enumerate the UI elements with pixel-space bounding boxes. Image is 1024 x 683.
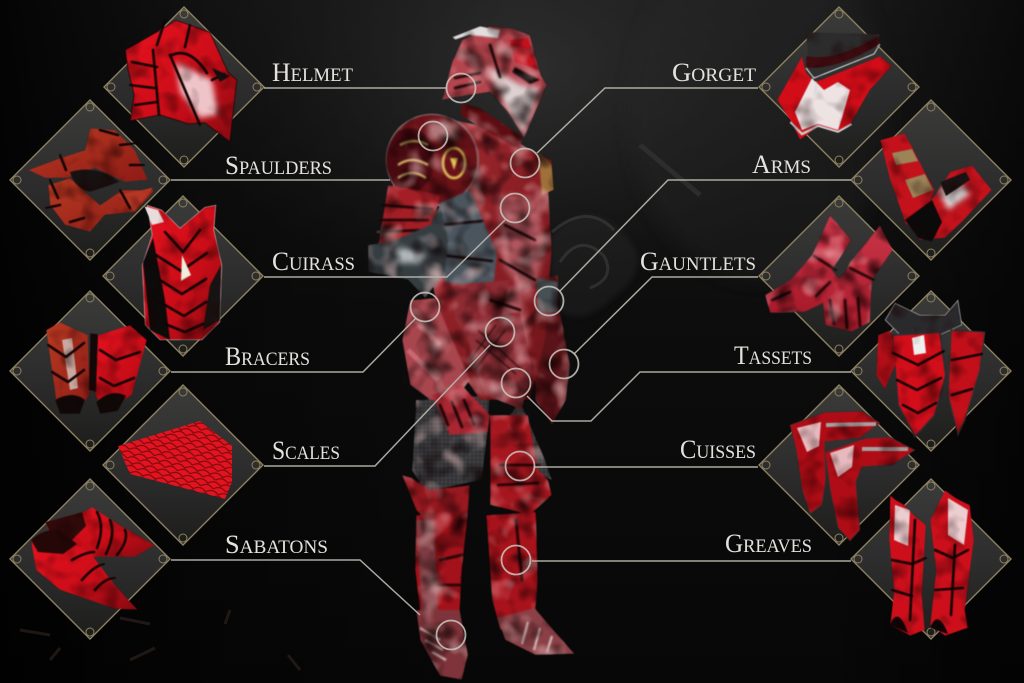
panel: arms	[851, 100, 1011, 260]
foot left	[416, 610, 468, 680]
icon: tassets piece	[876, 300, 985, 437]
icon: bracers piece	[46, 322, 147, 415]
icon: greaves piece	[889, 490, 974, 636]
label: Gauntlets: GAUNTLETS	[640, 247, 756, 276]
panel: greaves	[851, 479, 1011, 639]
label: Arms: ARMS	[752, 150, 811, 179]
glove	[432, 385, 490, 435]
icon: spaulders piece	[28, 128, 155, 232]
icon: sabatons piece	[31, 507, 155, 610]
panel: cuirass	[103, 196, 263, 356]
back arm	[535, 275, 570, 425]
foot right	[497, 608, 575, 655]
label: Spaulders: SPAULDERS	[225, 151, 332, 180]
panel: tassets	[851, 291, 1011, 451]
neck	[460, 103, 522, 150]
forearm	[402, 298, 470, 400]
shin left	[415, 515, 468, 612]
panel: spaulders	[10, 100, 170, 260]
icon: cuisses piece	[790, 411, 915, 541]
label: Cuirass: CUIRASS	[272, 247, 355, 276]
panel: bracers	[10, 291, 170, 451]
icon: arms piece	[880, 133, 992, 242]
panel: helmet	[104, 7, 264, 167]
label: Helmet: HELMET	[272, 58, 353, 87]
shoulder	[386, 114, 478, 206]
label: Scales: SCALES	[272, 436, 340, 465]
upper arm	[378, 185, 440, 250]
rear pauldron gold	[538, 150, 554, 195]
label: Greaves: GREAVES	[725, 529, 812, 558]
label: Cuisses: CUISSES	[680, 435, 756, 464]
shin right	[486, 512, 538, 630]
icon: gauntlets piece	[765, 215, 893, 332]
icon: cuirass piece	[142, 205, 222, 340]
connector lines	[171, 88, 851, 615]
panel: sabatons	[10, 479, 170, 639]
callout circles	[410, 74, 578, 650]
panel: gorget	[759, 7, 919, 167]
torso	[430, 120, 552, 400]
central armored figure	[368, 26, 575, 680]
panel: gauntlets	[759, 196, 919, 356]
label: Gorget: GORGET	[672, 58, 756, 87]
helmet	[442, 26, 547, 138]
panel: cuisses	[759, 385, 919, 545]
icon: helmet piece	[125, 20, 237, 142]
arm band right	[537, 278, 558, 312]
front tassets	[466, 312, 532, 410]
label: Bracers: BRACERS	[225, 342, 310, 371]
label: Sabatons: SABATONS	[225, 530, 328, 559]
thigh right	[490, 415, 552, 515]
icon: gorget piece	[777, 32, 892, 140]
elbow guard	[368, 205, 448, 298]
chainmail skirt	[412, 395, 490, 492]
waist detail	[450, 280, 510, 345]
chest plate	[436, 190, 497, 290]
icon: scales piece	[118, 421, 232, 499]
panel: scales	[103, 385, 263, 545]
label: Tassets: TASSETS	[734, 341, 812, 370]
knee left	[402, 475, 470, 525]
